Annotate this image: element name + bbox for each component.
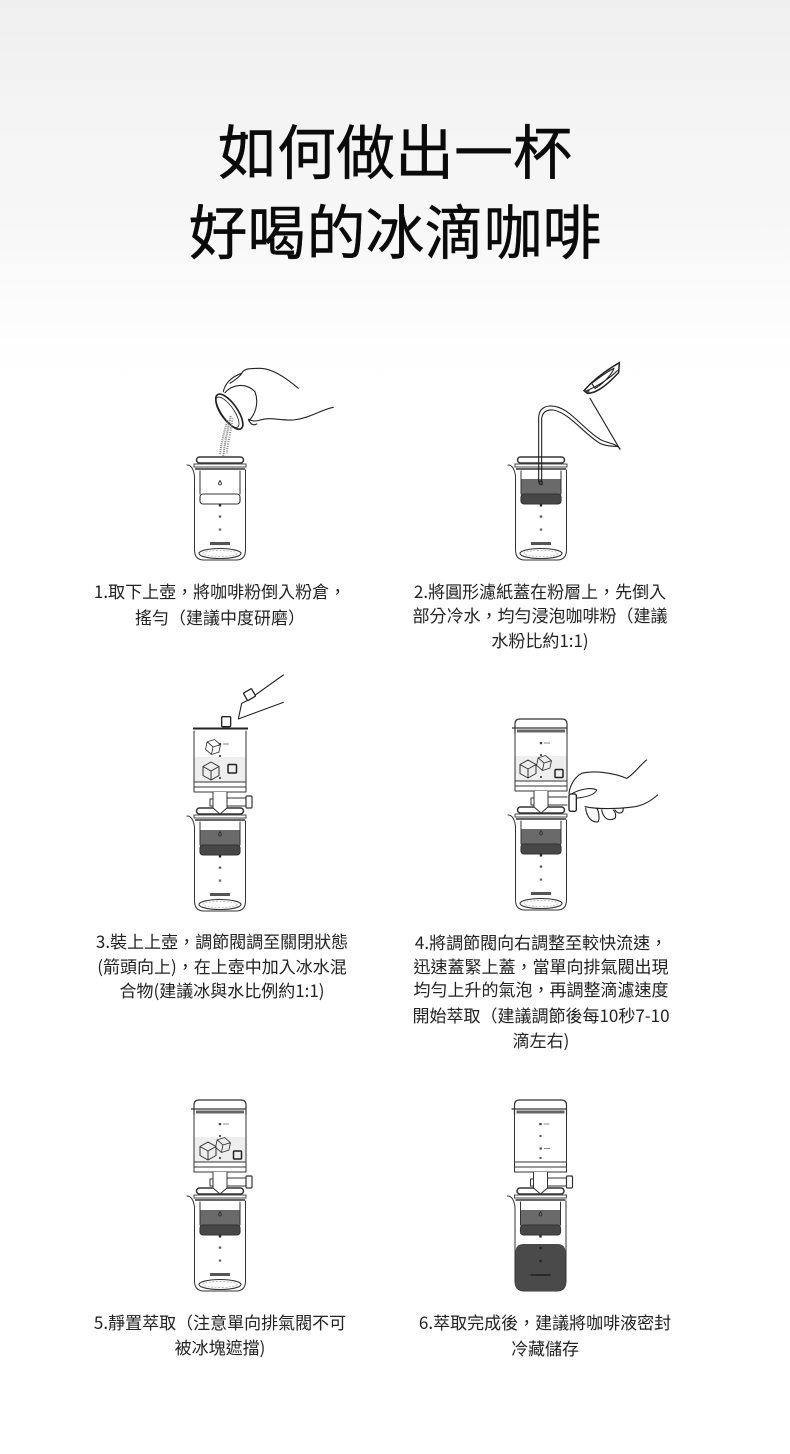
icon: hand holding powder cup (211, 368, 333, 456)
title: 如何做出一杯 (218, 106, 572, 191)
text: step 6 (419, 1309, 671, 1360)
text: step 6: 6.萃取完成後，建議將咖啡液密封 (419, 1309, 671, 1334)
text: step 2: 部分冷水，均勻浸泡咖啡粉（建議 (412, 602, 668, 627)
icon: jug (508, 807, 567, 910)
text: step 4: 4.將調節閥向右調整至較快流速， (415, 929, 667, 954)
illustration: step 2 pouring water with kettle (508, 363, 620, 560)
icon: ice cubes in tower (203, 738, 236, 780)
text: step 5: 5.靜置萃取（注意單向排氣閥不可 (94, 1309, 346, 1334)
text: step 4: 滴左右) (513, 1027, 569, 1052)
text: step 2: 水粉比約1:1) (491, 627, 589, 652)
text: step 3: 3.裝上上壺，調節閥調至關閉狀態 (96, 928, 348, 953)
text: step 4: 迅速蓋緊上蓋，當單向排氣閥出現 (414, 953, 668, 978)
text: step 4: 均勻上升的氣泡，再調整滴濾速度 (414, 976, 668, 1001)
icon: brewed coffee liquid (516, 1244, 566, 1291)
illustration: step 1 pouring coffee powder (187, 368, 333, 560)
icon: ice cubes (520, 754, 563, 778)
icon: jug (187, 808, 246, 911)
icon: jug (187, 457, 246, 560)
icon: jug (508, 1188, 566, 1291)
icon: gray water band (516, 756, 566, 781)
title (188, 106, 602, 271)
title: 好喝的冰滴咖啡 (188, 186, 602, 271)
text: step 5: 被冰塊遮擋) (175, 1334, 265, 1359)
text: step 1: 搖勻（建議中度研磨） (135, 604, 305, 629)
icon: gooseneck kettle (539, 363, 620, 484)
icon: hand dropping ice (222, 675, 283, 727)
icon: jug with wet coffee (508, 457, 567, 560)
icon: jug (187, 1188, 246, 1291)
icon: upper tower and lid (512, 1100, 572, 1194)
icon: coffee filter (520, 1210, 560, 1235)
illustration: step 5 resting during extraction (187, 1100, 252, 1291)
icon: upper tower and lid (191, 1100, 252, 1194)
illustration: step 4 adjusting valve (508, 719, 658, 910)
text: step 3 (96, 928, 348, 1002)
icon: upper tower (193, 728, 252, 814)
icon: ice cubes (200, 1136, 242, 1160)
illustration: step 6 finished coffee (508, 1100, 572, 1291)
text: step 1: 1.取下上壺，將咖啡粉倒入粉倉， (94, 578, 346, 603)
text: step 2: 2.將圓形濾紙蓋在粉層上，先倒入 (414, 578, 666, 603)
text: step 4: 開始萃取（建議調節後每10秒7-10 (412, 1002, 670, 1027)
icon: coffee filter (521, 829, 561, 854)
illustration: step 3 adding ice (187, 675, 283, 911)
text: step 1 (94, 578, 346, 629)
text: step 3: (箭頭向上)，在上壺中加入冰水混 (97, 953, 347, 978)
icon: gray water band (194, 1137, 246, 1162)
icon: upper tower and lid (512, 719, 567, 813)
icon: hand turning valve (569, 760, 658, 822)
icon: coffee filter (200, 1210, 240, 1235)
icon: coffee filter (200, 830, 240, 855)
text: step 4 (412, 929, 670, 1052)
text: step 6: 冷藏儲存 (511, 1335, 579, 1360)
icon: gray water band (194, 757, 246, 782)
text: step 2 (412, 578, 668, 652)
text: step 5 (94, 1309, 346, 1359)
text: step 3: 合物(建議冰與水比例約1:1) (119, 977, 325, 1002)
